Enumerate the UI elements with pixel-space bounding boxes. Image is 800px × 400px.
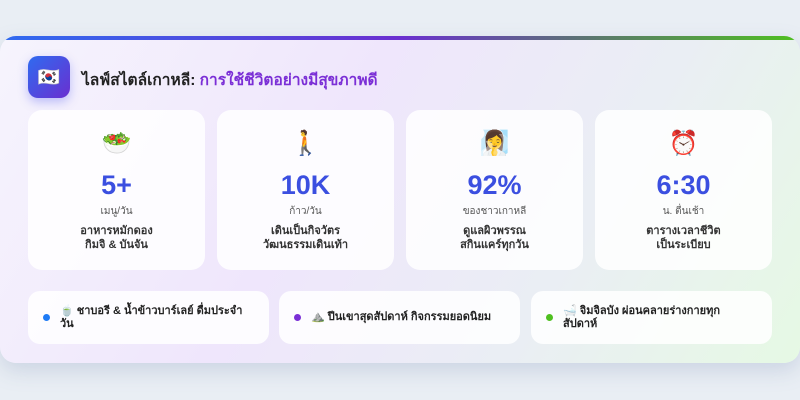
panel: food — [28, 110, 205, 270]
panel: wake time: น. ตื่นเช้า — [663, 206, 704, 217]
title: ไลฟ์สไตล์เกาหลี: การใช้ชีวิตอย่างมีสุขภาพดี — [82, 72, 378, 89]
panel: food: เมนู/วัน — [100, 206, 133, 217]
panel: skincare: 92% — [467, 170, 522, 200]
panel: wake time — [595, 110, 772, 270]
panel: wake time: เป็นระเบียบ — [656, 239, 711, 251]
tip: tea — [28, 291, 269, 344]
tip: jjimjilbang: 🛁 จิมจิลบัง ผ่อนคลายร่างกายทุก — [563, 304, 720, 316]
panel: skincare: ดูแลผิวพรรณ — [463, 225, 526, 237]
panel: walking: วัฒนธรรมเดินเท้า — [263, 239, 348, 251]
panel: food: 5+ — [101, 170, 132, 200]
panel: walking: 🚶 — [291, 130, 320, 157]
panel: wake time: 6:30 — [656, 170, 711, 200]
panel: walking: 10K — [281, 170, 330, 200]
panel: walking: ก้าว/วัน — [289, 206, 322, 217]
panel: skincare: สกินแคร์ทุกวัน — [460, 239, 529, 251]
panel: food: 🥗 — [102, 130, 131, 157]
panel: food: อาหารหมักดอง — [80, 225, 153, 237]
panel: food: กิมจิ & บันจัน — [85, 239, 148, 251]
tip: jjimjilbang — [531, 291, 772, 344]
tip: tea: 🍵 ชาบอรี & น้ำข้าวบาร์เลย์ ดื่มประจำวัน — [60, 304, 242, 330]
icon: flag — [28, 56, 70, 98]
panel: wake time: ตารางเวลาชีวิต — [646, 225, 721, 237]
panel: walking: เดินเป็นกิจวัตร — [271, 225, 340, 237]
panel: skincare: 🧖‍♀️ — [480, 130, 509, 157]
icon: flag: 🇰🇷 — [38, 66, 60, 86]
tip: jjimjilbang: สัปดาห์ — [563, 318, 597, 330]
tip: hiking — [279, 291, 520, 344]
panel: walking — [217, 110, 394, 270]
tip: hiking: ⛰️ ปีนเขาสุดสัปดาห์ กิจกรรมยอดนิยม — [311, 311, 491, 323]
panel: skincare: ของชาวเกาหลี — [463, 206, 526, 217]
panel: wake time: ⏰ — [669, 130, 698, 157]
panel: skincare — [406, 110, 583, 270]
